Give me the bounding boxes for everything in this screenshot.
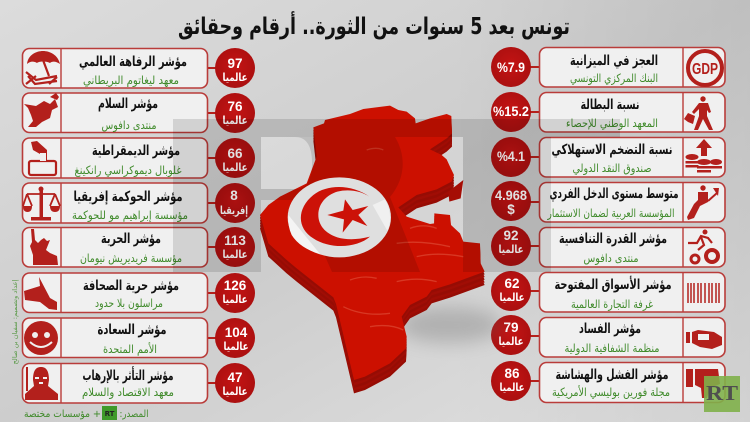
row: governance index: مؤشر الحوكمة إفريقيا: [74, 189, 182, 205]
row: competitiveness: عالميا: [498, 243, 524, 256]
row: freedom index: مؤسسة فريديريش نيومان: [80, 251, 182, 266]
row: peace index: 76: [227, 99, 243, 114]
row: open markets: 62: [504, 276, 520, 291]
row: peace index: عالميا: [222, 114, 248, 127]
row: peace index: مؤشر السلام: [98, 96, 158, 112]
panel: left indicators: [22, 48, 255, 403]
icon: thumbs down: [686, 369, 720, 398]
row: terrorism index: عالميا: [222, 385, 248, 398]
logo: RT: [704, 376, 740, 412]
row: GDP per capita: المؤسسة العربية لضمان الاستثمار: [547, 206, 674, 221]
icon: Tunisian flag emblem: [288, 177, 391, 257]
row: budget deficit: العجز في الميزانية: [570, 53, 658, 69]
row: happiness index: الأمم المتحدة: [103, 342, 157, 356]
source line: المصدر:: [120, 409, 148, 420]
row: governance index: إفريقيا: [220, 204, 248, 217]
icon: smiley: [24, 321, 58, 355]
icon: mini RT logo: RT: [105, 410, 115, 418]
source line: +: [93, 409, 101, 420]
logo: RT: RT: [706, 381, 738, 405]
row: happiness index: مؤشر السعادة: [98, 322, 166, 338]
row: terrorism index: مؤشر التأثر بالإرهاب: [82, 366, 174, 384]
icon: scales: [23, 186, 60, 220]
row: inflation: [491, 137, 725, 177]
row: corruption: عالميا: [498, 335, 524, 348]
row: freedom index: مؤشر الحرية: [101, 231, 161, 247]
row: prosperity index: معهد ليغاتوم البريطاني: [83, 73, 179, 88]
row: press freedom index: 126: [224, 278, 247, 293]
title: تونس بعد 5 سنوات من الثورة.. أرقام وحقائق: [178, 10, 570, 40]
row: press freedom index: [22, 273, 255, 313]
icon: dove: [24, 93, 59, 127]
icon: GDP sign: GDP: [692, 61, 718, 78]
map of Tunisia: [260, 106, 485, 393]
row: peace index: [22, 93, 255, 133]
icon: ballot box: [29, 141, 56, 175]
credit vertical text: إعداد وتصميم: سفيان بن صالح: [11, 279, 19, 364]
row: democracy index: مؤشر الديمقراطية: [92, 143, 180, 159]
row: terrorism index: [22, 363, 255, 403]
row: prosperity index: 97: [227, 56, 243, 71]
row: competitiveness: [491, 226, 725, 267]
row: democracy index: عالميا: [222, 161, 248, 174]
row: GDP per capita: $: [507, 202, 515, 217]
icon: statue of liberty: [30, 229, 58, 265]
row: fragile states: عالميا: [500, 381, 524, 394]
row: inflation: صندوق النقد الدولي: [572, 161, 652, 176]
row: GDP per capita: متوسط مستوى الدخل الفردي: [550, 186, 678, 203]
row: happiness index: عالميا: [224, 340, 248, 353]
row: prosperity index: عالميا: [222, 71, 248, 84]
icon: umbrella and lounger: [26, 51, 60, 84]
row: terrorism index: 47: [227, 370, 243, 385]
icon: GDP sign: [688, 51, 722, 85]
icon: coins and arrow: [686, 139, 722, 172]
row: press freedom index: عالميا: [222, 293, 248, 306]
icon: hand with money: [686, 330, 722, 349]
row: unemployment: المعهد الوطني للإحصاء: [566, 116, 658, 131]
row: unemployment: %15.2: [493, 104, 529, 119]
row: freedom index: عالميا: [222, 248, 248, 261]
row: happiness index: 104: [225, 325, 248, 340]
row: open markets: عالميا: [500, 291, 524, 304]
row: corruption: [491, 315, 725, 357]
row: budget deficit: %7.9: [497, 60, 525, 75]
row: governance index: 8: [230, 188, 238, 203]
row: peace index: منتدى دافوس: [102, 118, 156, 133]
row: budget deficit: [491, 47, 725, 87]
row: corruption: 79: [503, 320, 519, 335]
row: governance index: مؤسسة إبراهيم مو للحوكمة: [72, 208, 188, 223]
icon: hand with pen: [24, 277, 57, 310]
watermark: RT letters: [173, 119, 620, 272]
row: terrorism index: معهد الاقتصاد والسلام: [82, 385, 174, 400]
row: open markets: غرفة التجارة العالمية: [571, 297, 653, 312]
source line: مؤسسات مختصة: [24, 409, 90, 420]
row: GDP per capita: [491, 181, 725, 222]
row: unemployment: [491, 92, 725, 132]
row: fragile states: مجلة فورين بوليسي الأمريكية: [552, 385, 670, 400]
icon: rising man: [687, 185, 719, 220]
panel: right indicators: [491, 47, 725, 403]
row: unemployment: نسبة البطالة: [580, 97, 640, 113]
icon: barcode: [688, 283, 719, 303]
row: competitiveness: منتدى دافوس: [584, 251, 638, 266]
row: corruption: منظمة الشفافية الدولية: [564, 341, 660, 356]
row: competitiveness: مؤشر القدرة التنافسية: [559, 231, 667, 247]
row: press freedom index: مراسلون بلا حدود: [95, 296, 163, 311]
row: freedom index: [22, 227, 255, 267]
row: inflation: نسبة التضخم الاستهلاكي: [552, 142, 672, 158]
map shadow: [398, 307, 502, 343]
row: happiness index: [22, 318, 255, 358]
row: freedom index: 113: [224, 233, 246, 248]
row: open markets: مؤشر الأسواق المفتوحة: [554, 276, 672, 293]
row: democracy index: [22, 138, 255, 178]
row: prosperity index: مؤشر الرفاهة العالمي: [79, 54, 187, 70]
row: prosperity index: [22, 48, 255, 88]
row: democracy index: 66: [227, 146, 243, 161]
row: competitiveness: 92: [503, 228, 519, 243]
row: inflation: %4.1: [497, 149, 525, 164]
icon: runner on gears: [688, 230, 718, 263]
row: press freedom index: مؤشر حرية الصحافة: [83, 278, 179, 294]
row: GDP per capita: 4.968: [495, 188, 527, 203]
icon: masked fighter: [25, 367, 58, 400]
source line: [24, 406, 148, 420]
row: fragile states: [491, 361, 725, 403]
row: budget deficit: البنك المركزي التونسي: [570, 71, 658, 86]
row: corruption: مؤشر الفساد: [579, 321, 641, 337]
row: fragile states: 86: [504, 366, 520, 381]
row: governance index: [22, 183, 255, 223]
row: fragile states: مؤشر الفشل والهشاشة: [556, 367, 668, 383]
row: democracy index: غلوبال ديموكراسي رانكينغ: [74, 163, 182, 178]
row: open markets: [491, 271, 725, 312]
icon: walking man with box: [684, 96, 713, 130]
